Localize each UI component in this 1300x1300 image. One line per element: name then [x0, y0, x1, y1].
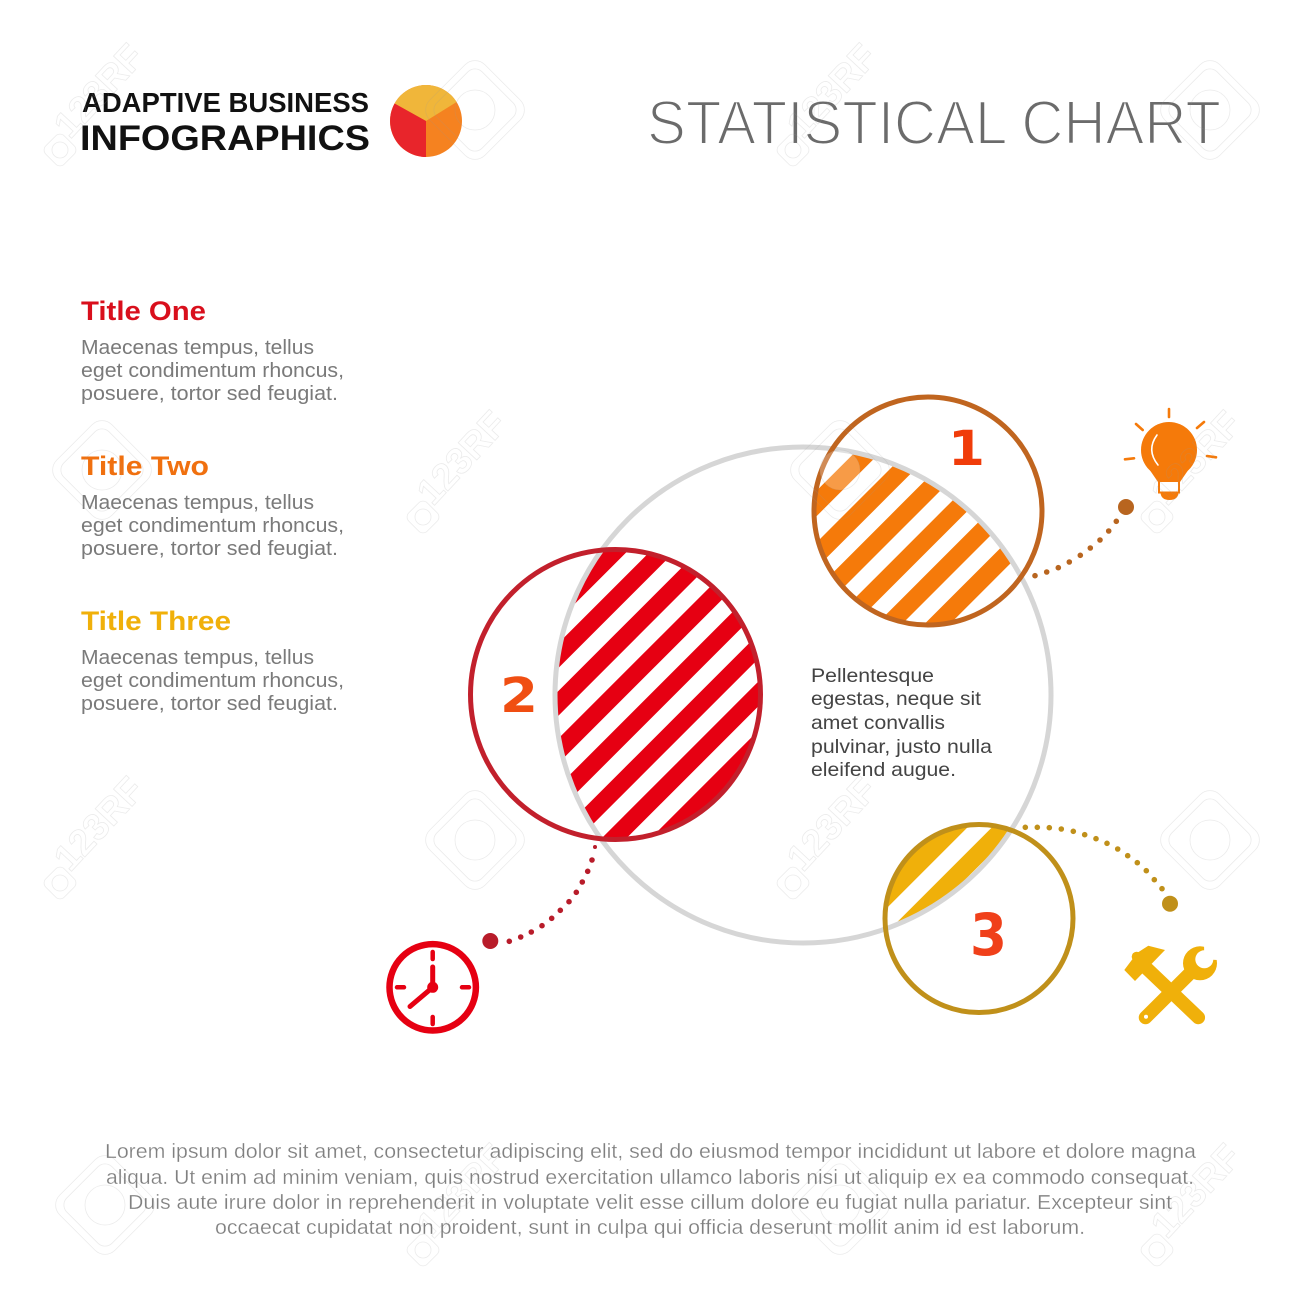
center text block: pulvinar, justo nulla — [811, 736, 992, 758]
legend item three: Maecenas tempus, tellus — [81, 647, 314, 669]
stripes: overlap 3 — [888, 828, 1007, 922]
watermark stamps: 123RF — [409, 403, 515, 512]
footer text block: Duis aute irure dolor in reprehenderit in voluptate velit esse cillum dolore eu fugiat nulla pariatur. Excepteur sint — [128, 1192, 1172, 1214]
large grey circle — [555, 447, 1051, 943]
legend item three: Title Three — [81, 606, 231, 636]
legend item two: Maecenas tempus, tellus — [81, 492, 314, 514]
circle 2 — [470, 550, 760, 840]
panel: legend text blocks — [81, 296, 344, 715]
center text block: eleifend augue. — [811, 759, 956, 781]
watermark stamps: 123RF — [1143, 403, 1249, 512]
icon: tools — [1124, 942, 1226, 1019]
legend item three — [81, 606, 344, 715]
icon: clock — [390, 944, 476, 1030]
legend item one — [81, 296, 344, 405]
circle 3 — [885, 824, 1073, 1012]
number 2: 2 — [500, 668, 538, 724]
footer text block: occaecat cupidatat non proident, sunt in culpa qui officia deserunt mollit anim id est laborum. — [215, 1217, 1085, 1239]
legend item one: Maecenas tempus, tellus — [81, 337, 314, 359]
legend item two: posuere, tortor sed feugiat. — [81, 538, 338, 560]
legend item two — [81, 451, 344, 560]
center text block — [811, 665, 992, 781]
watermark stamps: 123RF — [46, 769, 152, 878]
watermark stamps: 123RF — [779, 36, 885, 145]
circle 1 — [814, 397, 1042, 625]
dotted connector 1 — [1032, 499, 1134, 578]
center text block: amet convallis — [811, 712, 945, 734]
icon: pie logo — [390, 85, 462, 157]
center text block: egestas, neque sit — [811, 688, 982, 710]
watermark stamps: 123RF — [46, 36, 152, 145]
icon: light bulb — [1125, 409, 1216, 500]
footer text block: aliqua. Ut enim ad minim veniam, quis nostrud exercitation ullamco laboris nisi ut aliquip ex ea commodo consequat. — [106, 1167, 1194, 1189]
legend item one: posuere, tortor sed feugiat. — [81, 383, 338, 405]
header logo — [80, 85, 462, 158]
watermark stamps: 123RF — [779, 769, 885, 878]
legend item one: eget condimentum rhoncus, — [81, 360, 344, 382]
legend item two: eget condimentum rhoncus, — [81, 515, 344, 537]
footer text block — [105, 1141, 1197, 1239]
number 3: 3 — [970, 901, 1007, 969]
legend item one: Title One — [81, 296, 206, 326]
dotted connector 2 — [482, 845, 597, 949]
legend item three: eget condimentum rhoncus, — [81, 670, 344, 692]
logo text: INFOGRAPHICS — [80, 119, 370, 158]
stripes: overlap 2 — [558, 552, 758, 837]
stripes: overlap 1 — [816, 454, 1010, 622]
logo text — [80, 87, 370, 158]
footer text block: Lorem ipsum dolor sit amet, consectetur adipiscing elit, sed do eiusmod tempor incididunt ut labore et dolore magna — [105, 1141, 1197, 1163]
title: STATISTICAL CHART — [647, 89, 1221, 158]
dotted connector 3 — [1023, 824, 1178, 912]
watermark stamps: 123RF — [409, 1136, 515, 1245]
center text block: Pellentesque — [811, 665, 934, 687]
venn diagram — [390, 394, 1205, 1034]
watermark stamps: 123RF — [1143, 1136, 1249, 1245]
number 1: 1 — [948, 421, 985, 477]
logo text: ADAPTIVE BUSINESS — [82, 87, 369, 118]
legend item three: posuere, tortor sed feugiat. — [81, 693, 338, 715]
legend item two: Title Two — [81, 451, 209, 481]
